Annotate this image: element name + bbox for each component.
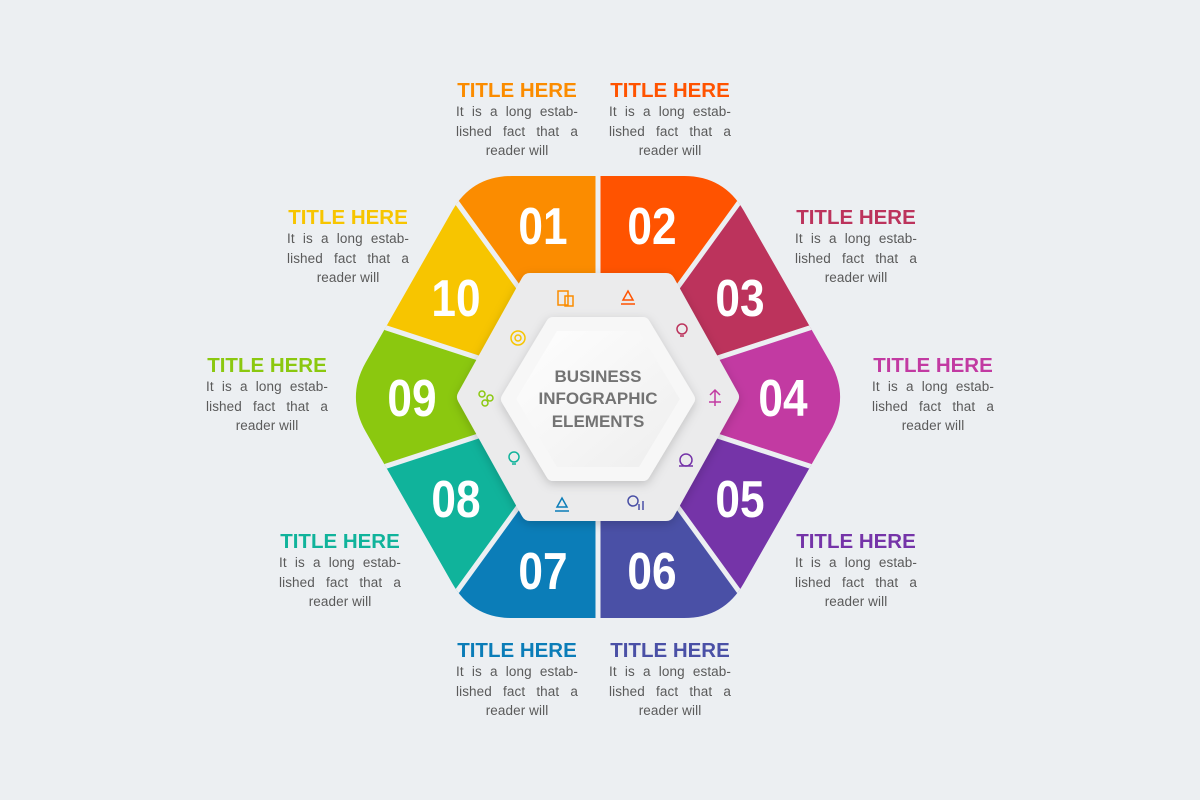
text block 02: It is a long estab-lished fact that a reader will [609, 104, 731, 158]
icon 6 [628, 496, 643, 510]
text block 03 [795, 206, 917, 285]
icon 7 [555, 498, 569, 511]
icon 5 [679, 454, 693, 466]
icon 8 [509, 452, 519, 464]
text block 06: TITLE HERE [610, 639, 730, 662]
icons [479, 291, 721, 511]
text block 08: It is a long estab-lished fact that a reader will [279, 555, 401, 609]
segment 09 [356, 328, 476, 466]
text block 02: TITLE HERE [610, 79, 730, 102]
text block 09 [206, 354, 328, 433]
text block 06: It is a long estab-lished fact that a reader will [609, 664, 731, 718]
text block 08 [279, 530, 401, 609]
text block 03: It is a long estab-lished fact that a reader will [795, 231, 917, 285]
segment 02 [600, 176, 739, 284]
center title [538, 367, 658, 431]
icon 1 [558, 291, 573, 306]
segment 10 [386, 203, 516, 356]
center title: ELEMENTS [552, 412, 644, 431]
text block 06 [609, 639, 731, 718]
icon 10 [511, 331, 525, 345]
segment 06 [600, 510, 739, 618]
text block 03: TITLE HERE [796, 206, 916, 229]
text block 01 [456, 79, 578, 158]
numbers: 08 [431, 471, 481, 529]
segment 01 [457, 176, 596, 284]
numbers: 09 [387, 370, 437, 428]
icon 2 [621, 291, 635, 304]
numbers [387, 198, 808, 601]
numbers: 02 [627, 198, 677, 256]
center title: INFOGRAPHIC [538, 389, 658, 408]
text block 04 [872, 354, 994, 433]
numbers: 01 [518, 198, 568, 256]
segment 07 [457, 510, 596, 618]
numbers: 07 [518, 543, 568, 601]
text block 10: It is a long estab-lished fact that a reader will [287, 231, 409, 285]
text block 08: TITLE HERE [280, 530, 400, 553]
text block 04: It is a long estab-lished fact that a reader will [872, 379, 994, 433]
numbers: 04 [758, 370, 808, 428]
text block 05: TITLE HERE [796, 530, 916, 553]
icon 9 [479, 391, 493, 406]
text block 04: TITLE HERE [873, 354, 993, 377]
text block 05: It is a long estab-lished fact that a reader will [795, 555, 917, 609]
text block 01: TITLE HERE [457, 79, 577, 102]
segment 04 [720, 328, 840, 466]
icon 3 [677, 324, 687, 336]
text block 07 [456, 639, 578, 718]
text block 01: It is a long estab-lished fact that a reader will [456, 104, 578, 158]
center title: BUSINESS [555, 367, 641, 386]
text block 10 [287, 206, 409, 285]
text block 02 [609, 79, 731, 158]
segment 03 [680, 203, 810, 356]
inner gray ring hexagon [466, 282, 730, 512]
icon 4 [709, 390, 721, 406]
text block 10: TITLE HERE [288, 206, 408, 229]
text block 07: It is a long estab-lished fact that a reader will [456, 664, 578, 718]
text block 07: TITLE HERE [457, 639, 577, 662]
numbers: 05 [715, 471, 765, 529]
hexagon diagram [356, 176, 840, 618]
text block 09: It is a long estab-lished fact that a reader will [206, 379, 328, 433]
numbers: 06 [627, 543, 677, 601]
segment 05 [680, 438, 810, 591]
numbers: 03 [715, 270, 765, 328]
segment 08 [386, 438, 516, 591]
text block 09: TITLE HERE [207, 354, 327, 377]
inner white hexagon [508, 324, 688, 474]
text block 05 [795, 530, 917, 609]
numbers: 10 [431, 270, 481, 328]
